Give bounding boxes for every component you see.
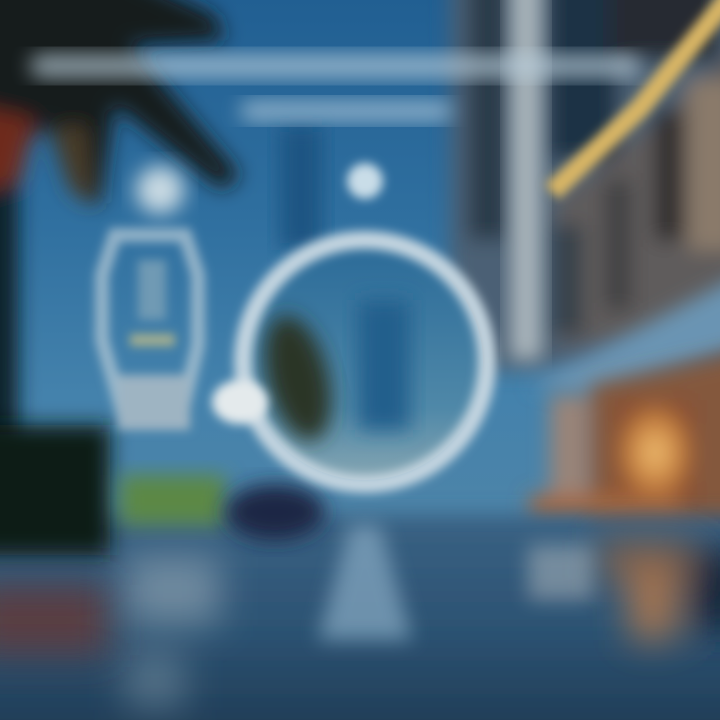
palm tree silhouette: [0, 0, 240, 460]
warm floor reflections: [0, 540, 720, 655]
golden roof line: [552, 0, 720, 192]
green shrub: [120, 475, 225, 525]
magnifier handle joint: [212, 380, 268, 424]
dark hedge: [0, 425, 110, 555]
floor with reflections: [0, 515, 720, 720]
background tower: [280, 125, 322, 250]
icon: left bottle cap: [136, 166, 184, 214]
title streak: first line: [30, 54, 640, 78]
right building: [450, 0, 720, 370]
title streak: second line: [240, 101, 452, 121]
blue balcony band: [530, 270, 720, 395]
warm lit interior: [530, 350, 720, 540]
lens interior: [252, 256, 482, 480]
icon: left bottle outline: [102, 235, 198, 430]
dark navy object: [225, 484, 325, 540]
icon: center dot: [347, 163, 383, 199]
vertical light column: [510, 0, 542, 360]
left reflection on floor: [125, 555, 220, 710]
right reflection on floor: [528, 545, 593, 600]
lens ring: [243, 240, 487, 484]
magnifying glass: [212, 240, 490, 484]
ring reflection on floor: [318, 525, 412, 640]
